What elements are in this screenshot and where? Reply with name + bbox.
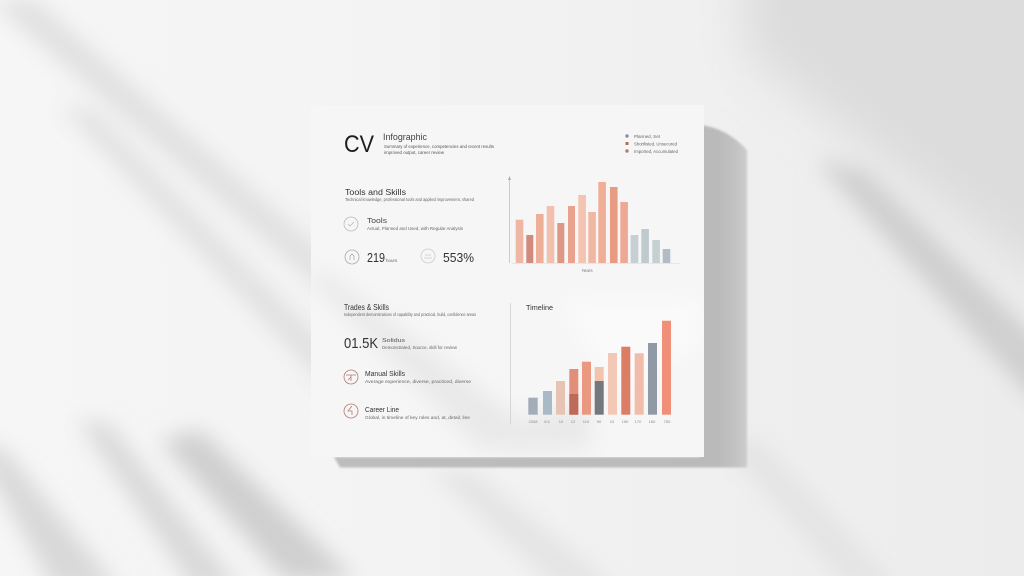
legend: Imported, Accumulated (634, 149, 679, 154)
stat description: Demonstrated, Source, skill for review (382, 345, 458, 350)
manual skills text: Manual Skills (365, 371, 405, 378)
heading and intro text: Summary of experience, competencies and recent results (384, 144, 495, 149)
CV card panel (300, 105, 704, 457)
chart heading: Timeline (526, 305, 553, 312)
icon: stat two (421, 249, 435, 263)
stat description: Solidus (382, 338, 405, 344)
heading: Tools and Skills (345, 188, 406, 197)
x-axis labels: 170 (635, 419, 642, 424)
x-axis labels: 10 (559, 419, 564, 424)
tools text: Actual, Planned and Used, with Regular Analysis (367, 226, 464, 231)
bar chart: bottom (528, 321, 671, 415)
stat description (382, 338, 458, 350)
stat: 219: 219 (367, 250, 385, 265)
card drop shadow (334, 125, 747, 468)
section: trades and skills (344, 303, 477, 420)
x-axis labels: 150 (622, 419, 629, 424)
bar chart: top (508, 176, 680, 273)
x-axis labels: 8.5 (544, 419, 551, 424)
legend: Shortlisted, Unsecured (634, 142, 678, 146)
tools text: Tools (367, 216, 387, 225)
heading and intro text (383, 132, 495, 155)
x-axis labels: 10 (610, 419, 615, 424)
legend: Planned, Set (634, 134, 661, 139)
career line text (365, 407, 471, 420)
manual skills text (365, 371, 472, 384)
x-axis labels: 12 (571, 419, 576, 424)
x-axis labels: 750 (664, 419, 671, 424)
x-axis labels: 160 (649, 419, 656, 424)
icon: career line (344, 404, 358, 418)
description: Independent demonstrations of capability and practical, build, confidence areas (344, 312, 477, 317)
title: CV (344, 131, 374, 158)
chart panel: timeline (510, 303, 671, 424)
x-axis labels: 90 (597, 419, 602, 424)
stat: 219 (367, 250, 398, 265)
x-axis labels: 2008 (529, 419, 538, 424)
career line text: Global, in timeline of key roles and, at, detail, line (365, 415, 471, 420)
career line text: Career Line (365, 407, 399, 414)
heading and intro text: Infographic (383, 132, 427, 142)
description: Technical knowledge, professional tools and applied improvement, shared (345, 197, 474, 202)
stat: 01.5K: 01.5K (344, 335, 378, 352)
heading and intro text: improved output, career review (384, 150, 445, 155)
tools text (367, 216, 464, 231)
icon: tools (344, 217, 358, 231)
stat: 553%: 553% (443, 250, 474, 265)
icon: stat one (345, 250, 359, 264)
section: tools and skills (344, 188, 474, 265)
x-axis labels (529, 419, 671, 424)
heading: Trades & Skills (344, 303, 389, 312)
legend (625, 134, 679, 154)
x-axis labels: 110 (583, 419, 590, 424)
manual skills text: Average experience, diverse, practiced, diverse (365, 379, 472, 384)
x-axis label: Years (581, 268, 593, 273)
icon: manual skills (344, 370, 358, 384)
stat: 219: hours (386, 258, 398, 263)
